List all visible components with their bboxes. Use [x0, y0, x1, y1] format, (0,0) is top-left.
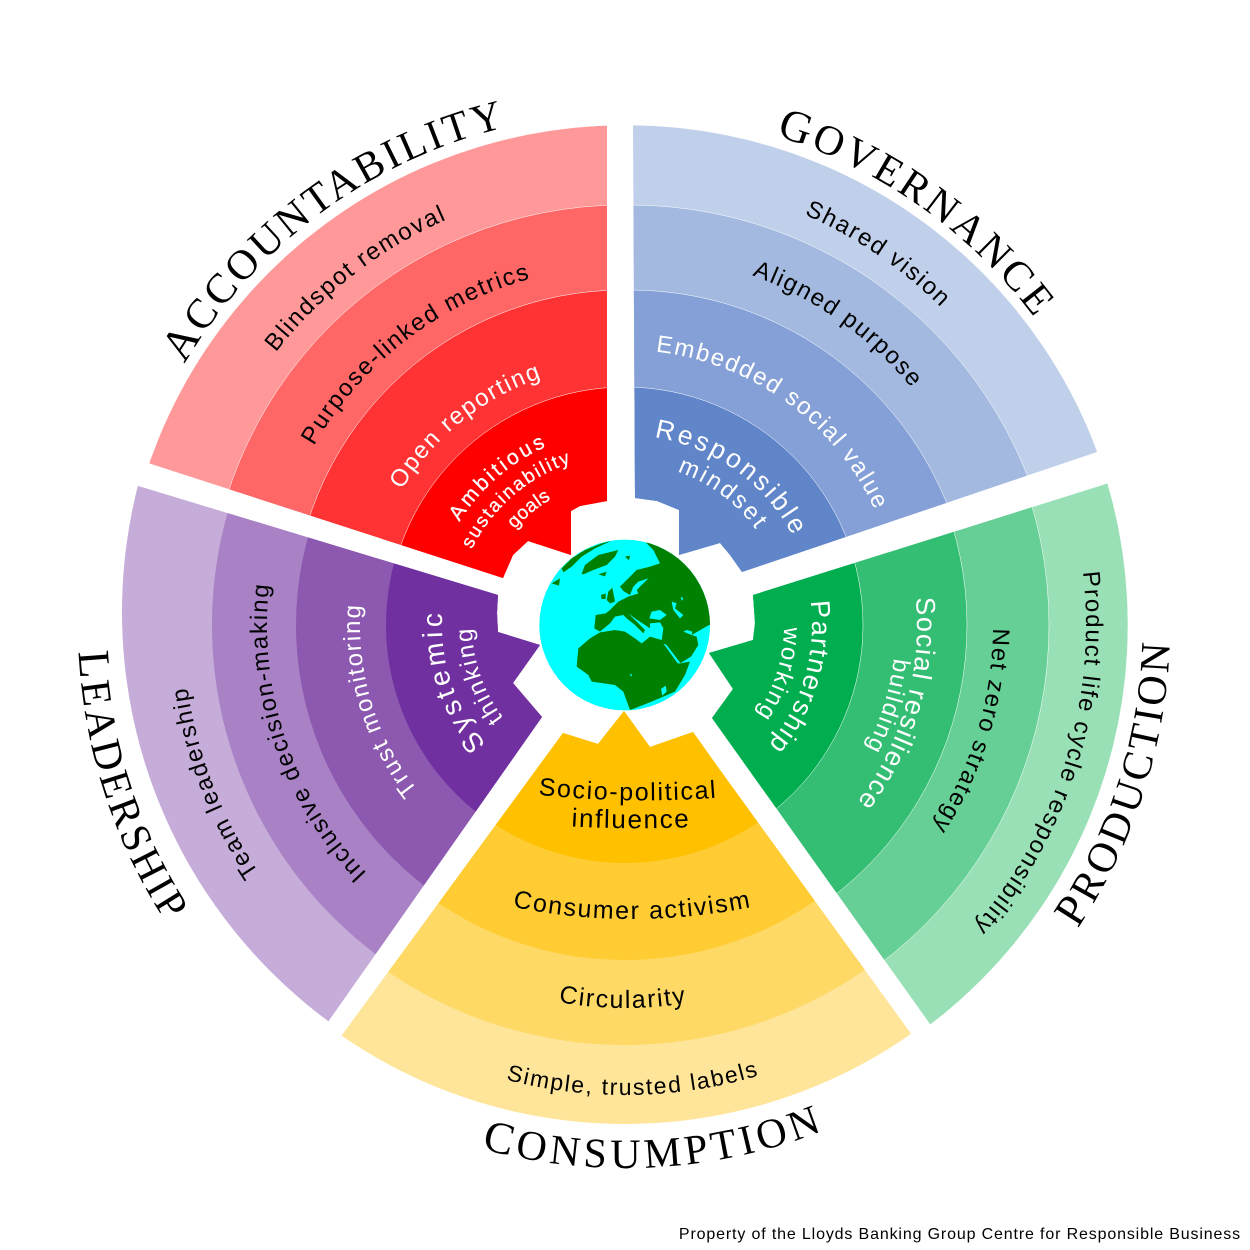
title: PRODUCTION: PRODUCTION [1054, 642, 1170, 928]
panel: production [709, 484, 1128, 1024]
title: LEADERSHIP: LEADERSHIP [78, 650, 185, 914]
label: Circularity: Circularity [560, 986, 684, 1010]
icon: globe [539, 535, 722, 710]
label: Ambitious sustainability goals: goals [509, 492, 550, 530]
label: Inclusive decision-making: Inclusive decision-making [250, 585, 366, 883]
label: Simple, trusted labels: Simple, trusted labels [508, 1064, 757, 1096]
production rings [709, 484, 1128, 1024]
label: Blindspot removal: Blindspot removal [264, 204, 445, 351]
label: Systemic thinking: Systemic [422, 614, 483, 752]
label: Net zero strategy: Net zero strategy [933, 630, 1010, 834]
governance rings [633, 125, 1098, 572]
label: Responsible mindset: mindset [678, 460, 766, 529]
label: Systemic thinking: thinking [459, 630, 502, 726]
accountability rings [149, 125, 607, 578]
title: CONSUMPTION: CONSUMPTION [486, 1106, 818, 1168]
label: Shared vision: Shared vision [806, 202, 948, 306]
panel: consumption [342, 711, 911, 1124]
label: Social resilience building: Social resilience [860, 598, 936, 808]
footer credit: Property of the Lloyds Banking Group Centre for Responsible Business [679, 1226, 1241, 1243]
label: Consumer activism: Consumer activism [515, 891, 750, 920]
label: Socio-political influence: influence [573, 808, 688, 828]
label: Open reporting: Open reporting [391, 366, 540, 486]
panel: leadership [122, 486, 542, 1022]
label: Product life cycle responsibility: Product life cycle responsibility [976, 572, 1104, 934]
label: Purpose-linked metrics: Purpose-linked metrics [300, 268, 528, 444]
title: GOVERNANCE: GOVERNANCE [781, 112, 1054, 316]
label: Responsible mindset: Responsible [656, 420, 802, 533]
label: Social resilience building: building [864, 660, 911, 752]
label: Team leadership: Team leadership [173, 690, 256, 882]
label: Aligned purpose: Aligned purpose [752, 262, 919, 386]
label: Embedded social value: Embedded social value [658, 336, 884, 508]
title: ACCOUNTABILITY: ACCOUNTABILITY [166, 101, 497, 364]
label: Ambitious sustainability goals: sustainability [464, 453, 568, 548]
leadership rings [122, 486, 542, 1022]
label: Socio-political influence: Socio-political [540, 778, 714, 806]
label: Ambitious sustainability goals: Ambitious [450, 438, 544, 522]
panel: accountability [149, 125, 607, 578]
label: Trust monitoring: Trust monitoring [342, 606, 414, 800]
consumption rings [342, 711, 911, 1124]
label: Partnership working: working [755, 628, 797, 720]
label: Partnership working: Partnership [770, 602, 830, 751]
panel: governance [633, 125, 1098, 572]
label: Socio-political influence [540, 778, 714, 828]
